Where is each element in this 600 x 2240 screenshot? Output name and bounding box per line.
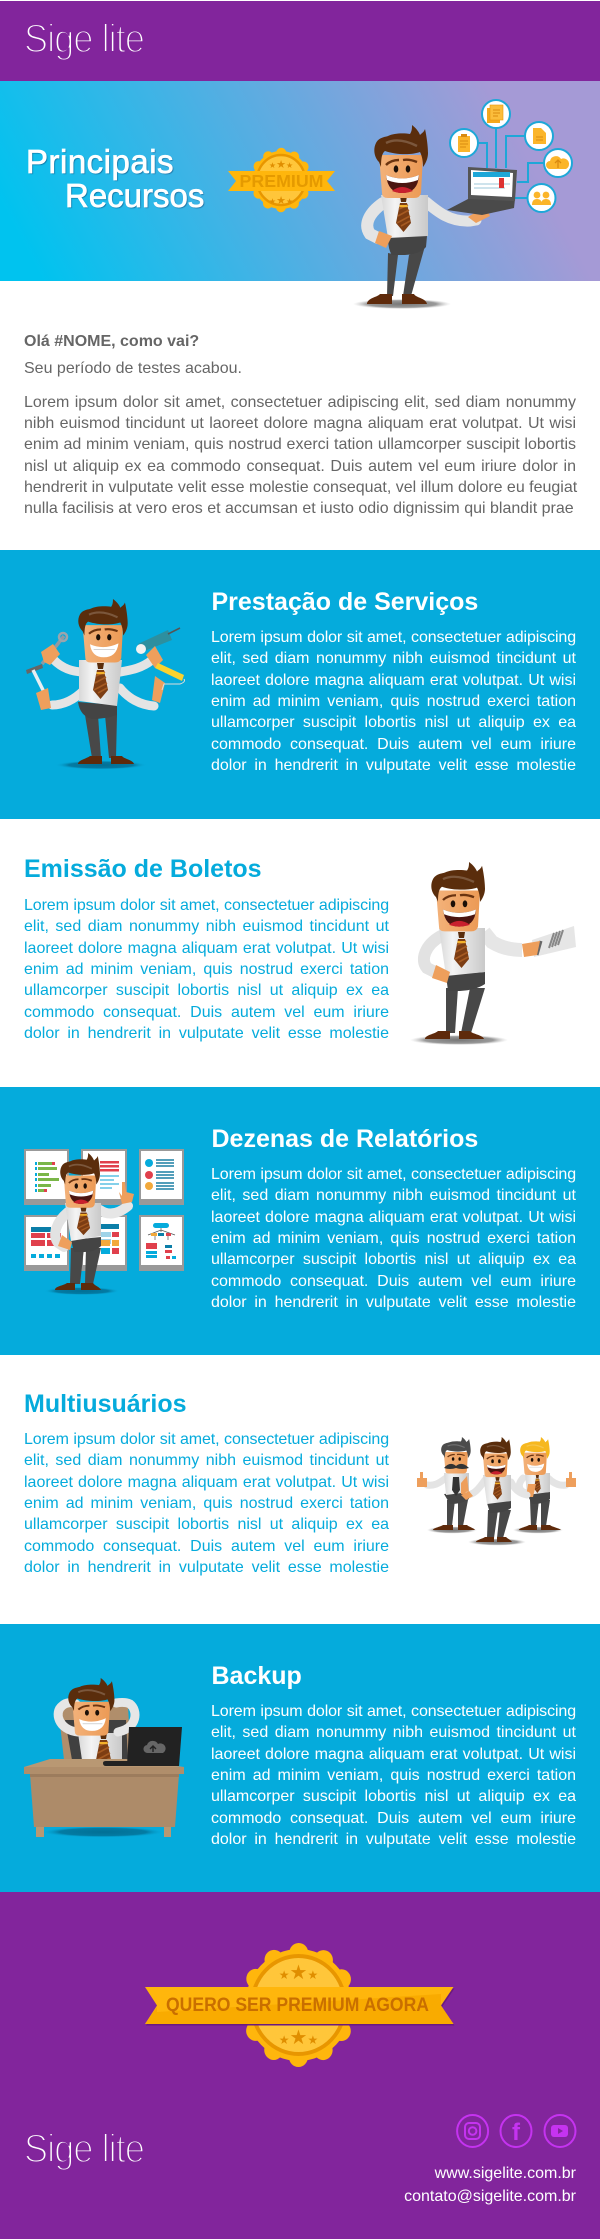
icon: facebook bbox=[500, 2115, 532, 2147]
subtitle: Seu período de testes acabou. bbox=[24, 360, 242, 377]
paragraph: nisl ut aliquip ex ea commodo consequat. Duis autem vel eum iriure dolor in bbox=[24, 458, 576, 475]
hero art layer bbox=[228, 99, 573, 309]
icon: facebook: f bbox=[512, 2119, 521, 2146]
paragraph: enim ad minim veniam, quis nostrud exerci tation ullamcorper suscipit lobortis bbox=[24, 436, 576, 453]
body text: dolor in hendrerit in vulputate velit esse molestie bbox=[211, 757, 576, 774]
left man bbox=[417, 1437, 477, 1534]
body text: commodo consequat. Duis autem vel eum iriure bbox=[211, 1273, 576, 1290]
body text: elit, sed diam nonummy nibh euismod tincidunt ut bbox=[24, 918, 389, 935]
icon: file bbox=[525, 122, 553, 150]
body text: enim ad minim veniam, quis nostrud exerci tation bbox=[211, 693, 576, 710]
body text: commodo consequat. Duis autem vel eum iriure bbox=[24, 1538, 389, 1555]
logo: Sige lite: Sige lite bbox=[24, 2127, 144, 2171]
contact text: contato@sigelite.com.br bbox=[404, 2188, 576, 2205]
heading: Emissão de Boletos bbox=[24, 855, 262, 883]
heading: Prestação de Serviços bbox=[212, 588, 478, 616]
panel: Dezenas de Relatórios bbox=[0, 1087, 600, 1355]
body text: laoreet dolore magna aliquam erat volutpat. Ut wisi bbox=[211, 672, 576, 689]
heading: Backup bbox=[212, 1662, 302, 1690]
body text: ullamcorper suscipit lobortis nisl ut aliquip ex ea bbox=[24, 982, 389, 999]
illustration: three men thumbs up bbox=[417, 1437, 576, 1546]
body text: commodo consequat. Duis autem vel eum iriure bbox=[24, 1004, 389, 1021]
premium call-to-action badge: ★★★ bbox=[279, 2025, 318, 2049]
illustration: man with tools bbox=[26, 599, 184, 770]
icon: cloud upload bbox=[544, 149, 572, 177]
body text: elit, sed diam nonummy nibh euismod tincidunt ut bbox=[211, 650, 576, 667]
report boards bbox=[24, 1149, 184, 1271]
body text: elit, sed diam nonummy nibh euismod tincidunt ut bbox=[24, 1452, 389, 1469]
premium call-to-action badge: ★★★ bbox=[279, 1960, 318, 1984]
body text: Lorem ipsum dolor sit amet, consectetuer adipiscing bbox=[211, 629, 576, 646]
hero title: Principais bbox=[26, 143, 174, 180]
body text: dolor in hendrerit in vulputate velit esse molestie bbox=[24, 1025, 389, 1042]
illustration: man holding paper bbox=[410, 862, 576, 1045]
body text: dolor in hendrerit in vulputate velit esse molestie bbox=[211, 1294, 576, 1311]
icon: users bbox=[528, 184, 556, 212]
icon: clipboard bbox=[450, 129, 478, 157]
body text: dolor in hendrerit in vulputate velit esse molestie bbox=[24, 1559, 389, 1576]
panel: Backup bbox=[0, 1624, 600, 1892]
body text: enim ad minim veniam, quis nostrud exerci tation bbox=[211, 1767, 576, 1784]
heading: Multiusuários bbox=[24, 1390, 187, 1418]
body text: dolor in hendrerit in vulputate velit esse molestie bbox=[211, 1831, 576, 1848]
body text: enim ad minim veniam, quis nostrud exerci tation bbox=[24, 1495, 389, 1512]
body text bbox=[211, 1703, 576, 1848]
premium call-to-action badge: QUERO SER PREMIUM AGORA bbox=[166, 1995, 429, 2016]
paragraph: Lorem ipsum dolor sit amet, consectetuer adipiscing elit, sed diam nonummy bbox=[24, 394, 576, 411]
body text bbox=[24, 897, 390, 1042]
paragraph: nibh euismod tincidunt ut laoreet dolore magna aliquam erat volutpat. Ut wisi bbox=[24, 415, 576, 432]
panel: Multiusuários bbox=[0, 1355, 600, 1624]
body text: enim ad minim veniam, quis nostrud exerci tation bbox=[211, 1230, 576, 1247]
middle man bbox=[461, 1437, 527, 1546]
panel: footer bbox=[0, 1892, 600, 2239]
body text: Lorem ipsum dolor sit amet, consectetuer adipiscing bbox=[211, 1166, 576, 1183]
body text: ullamcorper suscipit lobortis nisl ut aliquip ex ea bbox=[24, 1516, 389, 1533]
premium badge bbox=[228, 151, 335, 209]
paragraph: nulla facilisis at vero eros et accumsan et iusto odio dignissim qui blandit prae bbox=[24, 500, 574, 517]
body text bbox=[211, 629, 576, 774]
body text: ullamcorper suscipit lobortis nisl ut aliquip ex ea bbox=[211, 714, 576, 731]
hero title: Recursos bbox=[65, 177, 204, 214]
body text: laoreet dolore magna aliquam erat volutpat. Ut wisi bbox=[24, 940, 389, 957]
illustration: man pointing up bbox=[44, 1153, 134, 1295]
body text: enim ad minim veniam, quis nostrud exerci tation bbox=[24, 961, 389, 978]
body text: Lorem ipsum dolor sit amet, consectetuer adipiscing bbox=[24, 897, 389, 914]
hero title bbox=[26, 143, 204, 214]
contact text bbox=[404, 2165, 576, 2205]
body text bbox=[211, 1166, 576, 1311]
icon: youtube bbox=[544, 2115, 576, 2147]
paragraph: hendrerit in vulputate velit esse molestie consequat, vel illum dolore eu feugiat bbox=[24, 479, 577, 496]
body text bbox=[24, 1431, 390, 1576]
body text: laoreet dolore magna aliquam erat volutpat. Ut wisi bbox=[24, 1474, 389, 1491]
body text: ullamcorper suscipit lobortis nisl ut aliquip ex ea bbox=[211, 1251, 576, 1268]
greeting: Olá #NOME, como vai? bbox=[24, 333, 199, 350]
premium badge: PREMIUM bbox=[240, 171, 324, 191]
panel: Prestação de Serviços bbox=[0, 550, 600, 819]
body text: laoreet dolore magna aliquam erat volutpat. Ut wisi bbox=[211, 1209, 576, 1226]
body text: commodo consequat. Duis autem vel eum iriure bbox=[211, 736, 576, 753]
top purple header bbox=[0, 1, 600, 81]
network lines bbox=[478, 128, 544, 198]
icon: documents bbox=[482, 100, 510, 128]
heading: Dezenas de Relatórios bbox=[212, 1125, 478, 1153]
hero man with laptop bbox=[353, 125, 517, 309]
body text: laoreet dolore magna aliquam erat volutpat. Ut wisi bbox=[211, 1746, 576, 1763]
premium badge: ★★★ bbox=[269, 194, 293, 207]
body text: ullamcorper suscipit lobortis nisl ut aliquip ex ea bbox=[211, 1788, 576, 1805]
body text: elit, sed diam nonummy nibh euismod tincidunt ut bbox=[211, 1187, 576, 1204]
icon: instagram bbox=[457, 2115, 488, 2147]
logo: Sige lite: Sige lite bbox=[24, 17, 144, 61]
intro text panel bbox=[24, 333, 578, 517]
right man bbox=[513, 1437, 576, 1534]
body text: elit, sed diam nonummy nibh euismod tincidunt ut bbox=[211, 1724, 576, 1741]
illustration: man relaxing at desk bbox=[24, 1678, 184, 1838]
contact text: www.sigelite.com.br bbox=[435, 2165, 576, 2182]
premium badge: ★★★ bbox=[269, 158, 293, 171]
panel: Emissão de Boletos bbox=[0, 819, 600, 1087]
body text: Lorem ipsum dolor sit amet, consectetuer adipiscing bbox=[211, 1703, 576, 1720]
hero banner bbox=[0, 81, 600, 281]
body text: commodo consequat. Duis autem vel eum iriure bbox=[211, 1810, 576, 1827]
premium call-to-action badge bbox=[145, 1949, 454, 2061]
paragraph bbox=[24, 394, 578, 517]
body text: Lorem ipsum dolor sit amet, consectetuer adipiscing bbox=[24, 1431, 389, 1448]
